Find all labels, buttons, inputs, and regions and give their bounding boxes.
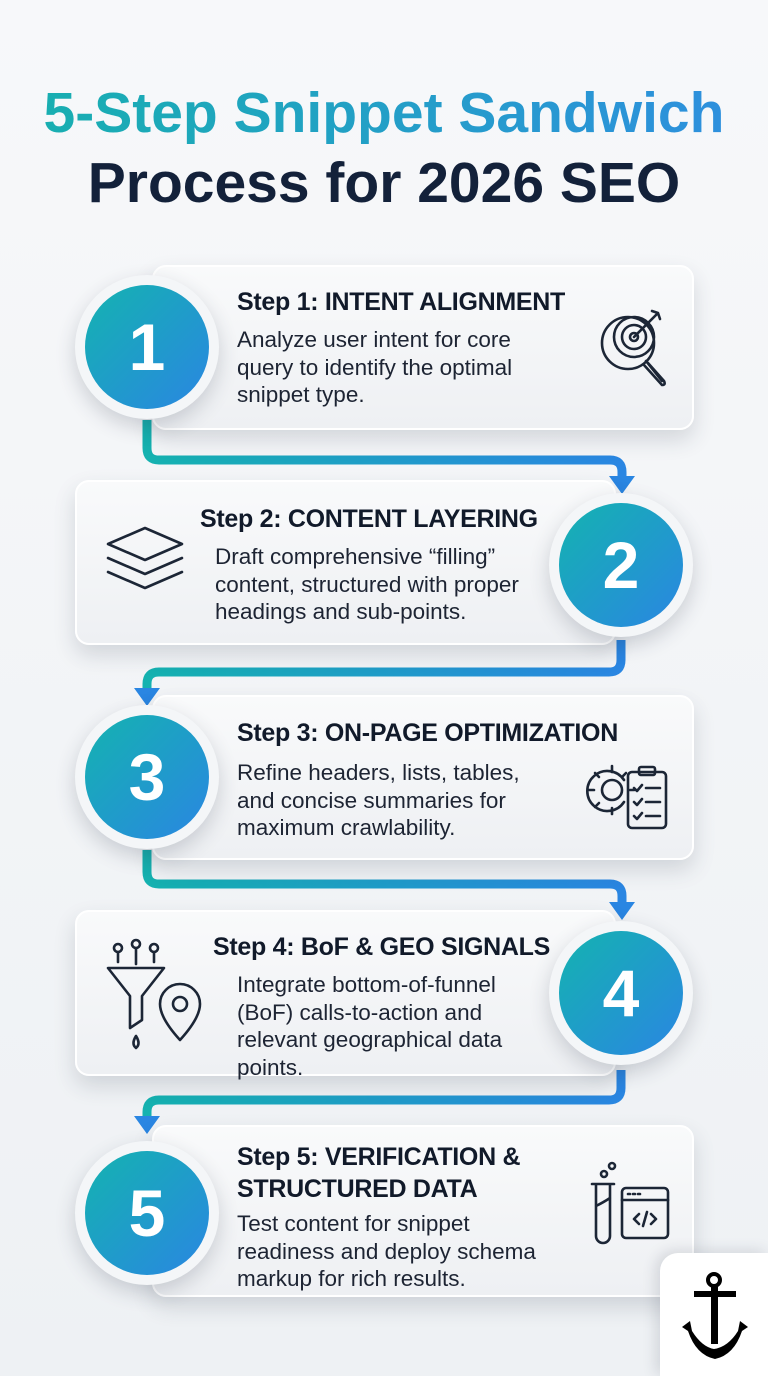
icon: layers	[106, 526, 184, 590]
step 4 body: Integrate bottom-of-funnel	[237, 972, 496, 997]
step 1 body: snippet type.	[237, 382, 365, 407]
step 1 body: Analyze user intent for core	[237, 327, 511, 352]
step 5 heading	[237, 1143, 520, 1203]
step 5 body: Test content for snippet	[237, 1211, 470, 1236]
title	[44, 81, 724, 215]
circle 4: 4	[603, 956, 639, 1030]
circle 5: 5	[129, 1176, 165, 1250]
icon: funnel and pin	[106, 938, 202, 1050]
step 3 body: and concise summaries for	[237, 788, 506, 812]
step 2 body	[215, 544, 519, 624]
step 4 body	[237, 972, 502, 1080]
step 5 heading: Step 5: VERIFICATION &	[237, 1143, 520, 1171]
anchor badge	[660, 1253, 768, 1376]
step 4 body: points.	[237, 1054, 303, 1080]
step 3 body	[237, 760, 520, 840]
circle 1	[75, 275, 219, 419]
step 4 card	[75, 910, 616, 1076]
title: Process for 2026 SEO	[88, 151, 680, 215]
step 5 card	[152, 1125, 694, 1297]
step 5 body	[237, 1211, 536, 1291]
step 3 body: maximum crawlability.	[237, 815, 455, 840]
step 2 heading: Step 2: CONTENT LAYERING	[200, 505, 538, 533]
step 5 body: markup for rich results.	[237, 1266, 466, 1291]
step 3 card	[152, 695, 694, 860]
step 5 heading: STRUCTURED DATA	[237, 1175, 477, 1203]
circle 3	[75, 705, 219, 849]
circle 1: 1	[129, 310, 165, 384]
circle 3: 3	[129, 740, 165, 814]
step 2 card	[75, 480, 616, 645]
step 4 heading: Step 4: BoF & GEO SIGNALS	[213, 933, 550, 961]
circle 4	[549, 921, 693, 1065]
title: 5-Step Snippet Sandwich	[44, 81, 724, 145]
step 2 body: headings and sub-points.	[215, 599, 466, 624]
step 3 body: Refine headers, lists, tables,	[237, 760, 520, 785]
step 1 body: query to identify the optimal	[237, 354, 512, 380]
circle 2	[549, 493, 693, 637]
circle 5	[75, 1141, 219, 1285]
icon: gear clipboard	[586, 764, 668, 830]
circle 2: 2	[603, 528, 639, 602]
step 1 card	[152, 265, 694, 430]
step 1 body	[237, 327, 512, 407]
step 3 heading: Step 3: ON-PAGE OPTIMIZATION	[237, 719, 618, 747]
step 2 body: content, structured with proper	[215, 572, 519, 596]
icon: anchor	[682, 1272, 748, 1359]
step 5 body: readiness and deploy schema	[237, 1238, 536, 1264]
step 1 heading: Step 1: INTENT ALIGNMENT	[237, 288, 565, 316]
step 4 body: (BoF) calls-to-action and	[237, 1000, 482, 1024]
step 4 body: relevant geographical data	[237, 1027, 502, 1052]
icon: test tube and code	[590, 1162, 670, 1244]
icon: target search	[600, 310, 666, 386]
step 2 body: Draft comprehensive “filling”	[215, 544, 495, 569]
